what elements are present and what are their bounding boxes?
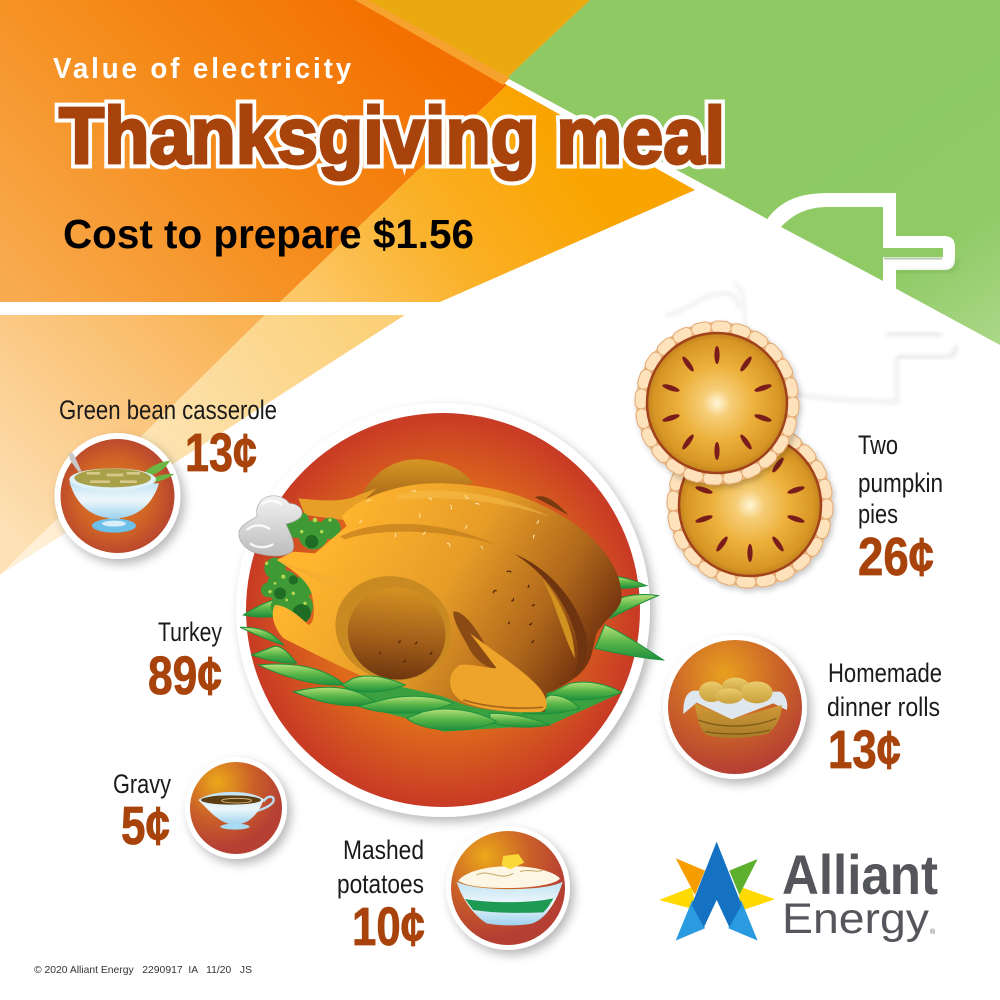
label: mashed potatoes: potatoes (337, 869, 424, 899)
icon: casserole bowl (68, 453, 174, 533)
panel: green background (507, 0, 1000, 345)
label: two pumpkin pies (858, 430, 943, 529)
label: gravy: Gravy (113, 769, 171, 799)
label: green bean casserole: Green bean casserole (59, 395, 277, 425)
panel: dinner rolls icon (663, 635, 807, 779)
label: two pumpkin pies: pumpkin (858, 468, 943, 498)
label: dinner rolls: Homemade (828, 658, 942, 688)
panel: mashed potatoes icon (446, 826, 570, 950)
icon: back pie (673, 428, 827, 582)
panel: gravy icon (185, 757, 287, 859)
panel: turkey plate (236, 403, 663, 817)
plug and cord (0, 193, 957, 402)
label: dinner rolls (827, 658, 942, 722)
registered mark: ® (930, 928, 936, 936)
label: two pumpkin pies: pies (858, 499, 898, 529)
price: dinner rolls: 13¢ (828, 720, 901, 780)
logo: Alliant Energy (659, 842, 938, 943)
panel: orange header background (0, 0, 507, 302)
panel: two pumpkin pies (641, 327, 827, 582)
panel: amber header triangle (280, 85, 695, 302)
icon: gravy boat (198, 792, 274, 830)
price: turkey: 89¢ (148, 646, 222, 706)
panel: faded lower left wedge (0, 315, 265, 575)
price: gravy: 5¢ (121, 796, 170, 856)
label: dinner rolls: dinner rolls (827, 692, 940, 722)
panel: gold corner triangle (365, 0, 590, 78)
label: two pumpkin pies: Two (858, 430, 898, 460)
panel: green bean casserole icon (54, 433, 180, 559)
label: mashed potatoes: Mashed (343, 835, 424, 865)
icon: bread basket (683, 678, 787, 738)
title: Thanksgiving meal (59, 91, 725, 180)
price: two pumpkin pies: 26¢ (858, 527, 934, 587)
price: mashed potatoes: 10¢ (352, 897, 425, 957)
wordmark: Alliant: Alliant (782, 843, 938, 906)
title: Thanksgiving meal (59, 91, 725, 180)
icon: front pie (641, 327, 793, 479)
icon: roast turkey on greens (239, 459, 663, 732)
subtitle: Value of electricity (53, 53, 354, 85)
copyright footer: © 2020 Alliant Energy 2290917 IA 11/20 JS (34, 964, 252, 976)
panel: pale lower left wedge (0, 315, 405, 575)
label: mashed potatoes (337, 835, 424, 899)
panel: orange highlight stripe (355, 0, 510, 85)
icon: Alliant Energy star (659, 842, 775, 941)
cost to prepare: Cost to prepare $1.56 (63, 211, 474, 257)
price: green bean casserole: 13¢ (185, 423, 257, 483)
label: turkey: Turkey (158, 617, 222, 647)
wordmark: Energy: Energy (782, 895, 930, 943)
icon: mashed potato bowl (457, 854, 563, 925)
